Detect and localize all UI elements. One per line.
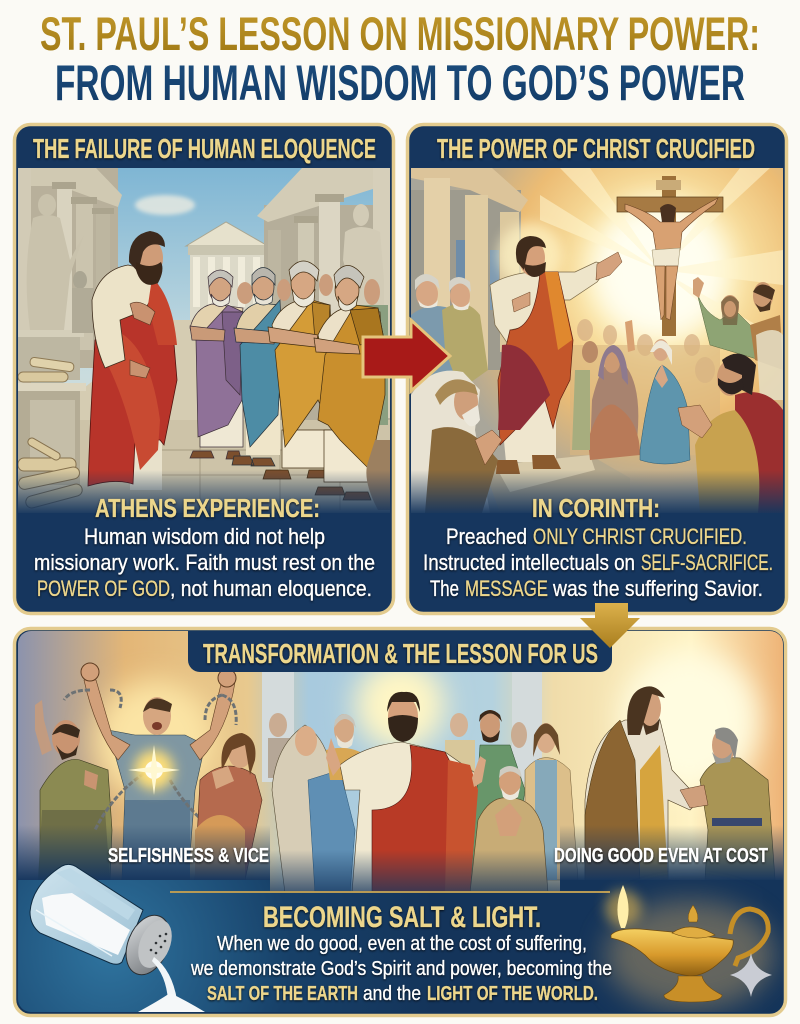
header tab [188, 631, 612, 672]
heading: becoming salt and light: BECOMING SALT & LIGHT. [263, 901, 541, 934]
body text: and the [363, 983, 421, 1005]
arrow: gold down arrow [580, 603, 640, 648]
left elders [411, 274, 488, 390]
bottom band [18, 880, 783, 1012]
caption fill [18, 513, 390, 610]
chains [64, 690, 236, 835]
caption text: was the suffering Savior. [552, 576, 763, 601]
caption text: Preached [446, 524, 527, 549]
right men [693, 277, 783, 400]
old man kneeling [411, 371, 502, 513]
steps [490, 455, 624, 492]
plaza ground [80, 320, 245, 420]
caption text: , not human eloquence. [170, 576, 372, 601]
header bar [411, 128, 783, 168]
kneeling man right [678, 354, 783, 513]
illustration: Athens scene [17, 168, 390, 515]
caption fill [411, 513, 783, 610]
scrolls upper [18, 357, 74, 382]
body text: SALT OF THE EARTH [207, 983, 358, 1005]
light rays and glows [95, 650, 760, 800]
glow [590, 200, 730, 340]
right building [257, 168, 390, 420]
woman [195, 733, 262, 880]
kneeling women [572, 339, 690, 464]
body text [190, 933, 612, 1005]
right statue [343, 204, 373, 305]
body text: LIGHT OF THE WORLD. [427, 983, 598, 1005]
left man [35, 700, 112, 880]
left pedestal [18, 383, 86, 485]
far temple [186, 222, 268, 320]
image fade to navy [411, 470, 783, 515]
Jesus helping [585, 686, 700, 880]
caption text: The [430, 576, 459, 601]
right scene fade to navy [560, 825, 783, 881]
caption text [34, 493, 375, 601]
icon: oil lamp [605, 885, 775, 1010]
panel: the power of Christ crucified [408, 124, 786, 614]
caption text: POWER OF GOD [37, 576, 170, 601]
Paul, downcast [88, 231, 177, 490]
illustration: transformation scene [18, 631, 783, 893]
title [40, 7, 760, 111]
label: selfishness and vice: SELFISHNESS & VICE [108, 845, 269, 867]
background temples [262, 672, 542, 782]
heading: TRANSFORMATION & THE LESSON FOR US [203, 638, 598, 669]
caption text: missionary work. Faith must rest on the [34, 550, 375, 575]
heading: THE FAILURE OF HUMAN ELOQUENCE [33, 133, 376, 164]
man receiving help [680, 728, 775, 880]
body text: we demonstrate God’s Spirit and power, becoming the [190, 958, 612, 980]
body text: When we do good, even at the cost of suffering, [217, 933, 587, 955]
chained man [64, 663, 236, 880]
vase [366, 440, 390, 510]
panel: the failure of human eloquence [14, 124, 394, 614]
center scene fade to navy [270, 850, 560, 894]
caption text: ATHENS EXPERIENCE: [95, 493, 320, 523]
caption text: Human wisdom did not help [84, 524, 325, 549]
left scene fade to navy [18, 825, 270, 881]
header bar [18, 128, 390, 168]
temple [411, 168, 528, 370]
cross [617, 176, 723, 336]
icon: salt shaker [30, 864, 205, 1012]
philosopher: purple robe [190, 270, 243, 459]
caption text: Instructed intellectuals on [423, 550, 635, 575]
rays [540, 168, 783, 325]
left statue [18, 194, 94, 380]
philosophers background heads [237, 274, 388, 425]
arrow: red right arrow [363, 320, 450, 391]
center crowd left [268, 713, 360, 893]
illustration: Corinth scene [411, 168, 783, 513]
left building [18, 168, 122, 388]
philosopher: blue robe [232, 268, 282, 466]
philosopher: gold robe [263, 261, 332, 479]
icon: sparkle [730, 953, 772, 997]
back crowd [570, 319, 720, 455]
center crowd right [445, 710, 578, 893]
caption text [423, 493, 773, 601]
burst [128, 745, 180, 795]
panel: transformation and the lesson for us [14, 628, 786, 1016]
gold divider line [170, 891, 610, 893]
scrolls lower [17, 437, 84, 509]
Paul center [326, 692, 486, 893]
Paul preaching [490, 223, 622, 474]
caption text: MESSAGE [465, 576, 548, 601]
seated old man [470, 766, 548, 893]
image fade to navy [18, 470, 390, 515]
philosopher: amber robe [314, 265, 385, 500]
caption text: IN CORINTH: [532, 493, 660, 523]
